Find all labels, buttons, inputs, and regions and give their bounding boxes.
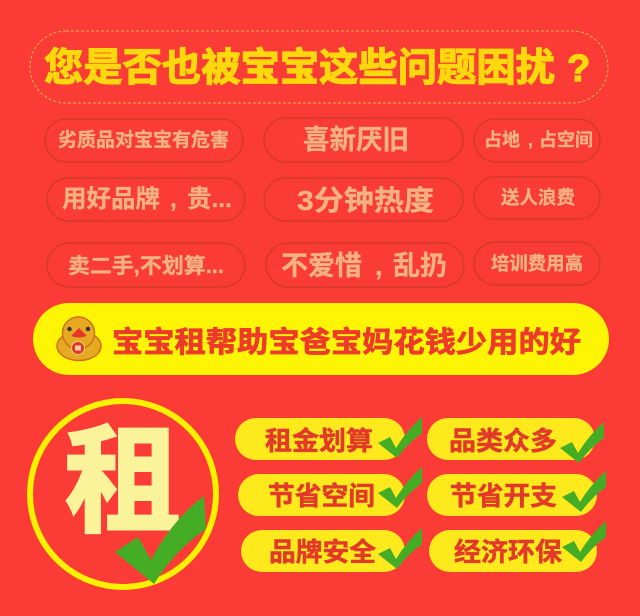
pill: gifting is wasteful bbox=[474, 177, 600, 219]
benefit: economical and green: 经济环保 bbox=[454, 537, 562, 567]
benefit: saves space: 节省空间 bbox=[268, 481, 375, 511]
pill: training cost: 培训费用高 bbox=[491, 253, 583, 274]
pill: inferior products: 劣质品对宝宝有危害 bbox=[58, 128, 229, 151]
panel: benefit pills bbox=[235, 417, 606, 572]
benefit: saves expenses: 节省开支 bbox=[450, 481, 557, 511]
icon: small check 3 bbox=[378, 467, 422, 508]
heading: title text: 您是否也被宝宝这些问题困扰 bbox=[44, 47, 555, 90]
pill: second hand not worthwhile bbox=[47, 243, 245, 287]
benefit: many categories bbox=[427, 418, 595, 460]
pill: careless toss: 乱扔 bbox=[393, 251, 447, 281]
heading: title text: ? bbox=[567, 48, 590, 90]
pill: careless toss: 不爱惜 bbox=[281, 251, 362, 281]
icon: small check 2 bbox=[560, 422, 604, 463]
benefit: economical and green bbox=[429, 530, 597, 572]
pill: training cost bbox=[474, 242, 600, 285]
pill: second hand not worthwhile: 卖二手,不划算... bbox=[68, 255, 224, 278]
pill: takes up space: , bbox=[528, 130, 533, 150]
banner: yellow slogan bbox=[33, 303, 609, 375]
benefit: brand safety bbox=[241, 530, 405, 572]
pill: novelty: 喜新厌旧 bbox=[303, 125, 409, 155]
benefit: good value rent bbox=[235, 418, 405, 460]
pill: careless toss: , bbox=[375, 251, 383, 281]
icon: small check 6 bbox=[562, 521, 606, 562]
pill: novelty bbox=[264, 118, 463, 162]
pill: good brands are expensive: , bbox=[170, 186, 177, 213]
pill: three minute enthusiasm bbox=[264, 178, 463, 221]
benefit: many categories: 品类众多 bbox=[449, 426, 557, 456]
pill: inferior products bbox=[45, 119, 243, 162]
pill: good brands are expensive: 贵... bbox=[187, 185, 232, 213]
panel: problem pills bbox=[45, 118, 600, 287]
pill: three minute enthusiasm: 3分钟热度 bbox=[297, 185, 434, 216]
pill: good brands are expensive: 用好品牌 bbox=[62, 185, 160, 213]
pill: careless toss bbox=[266, 243, 464, 287]
panel: title bbox=[30, 31, 608, 103]
icon: duck mascot bbox=[57, 317, 101, 360]
benefit: good value rent: 租金划算 bbox=[265, 426, 373, 456]
pill: takes up space bbox=[474, 119, 600, 162]
icon: small check 4 bbox=[562, 471, 606, 512]
icon: large check bbox=[115, 496, 206, 584]
icon: small check 1 bbox=[378, 417, 422, 458]
pill: good brands are expensive bbox=[47, 178, 245, 221]
pill: takes up space: 占地 bbox=[484, 130, 520, 150]
benefit: brand safety: 品牌安全 bbox=[269, 537, 376, 567]
pill: takes up space: 占空间 bbox=[539, 129, 593, 150]
text: rent character: 租 bbox=[65, 417, 181, 547]
benefit: saves space bbox=[238, 474, 405, 516]
benefit: saves expenses bbox=[427, 474, 597, 516]
icon: small check 5 bbox=[378, 528, 422, 569]
text: slogan: 宝宝租帮助宝爸宝妈花钱少用的好 bbox=[112, 326, 581, 359]
pill: gifting is wasteful: 送人浪费 bbox=[501, 187, 575, 208]
panel: rent badge bbox=[30, 401, 216, 587]
